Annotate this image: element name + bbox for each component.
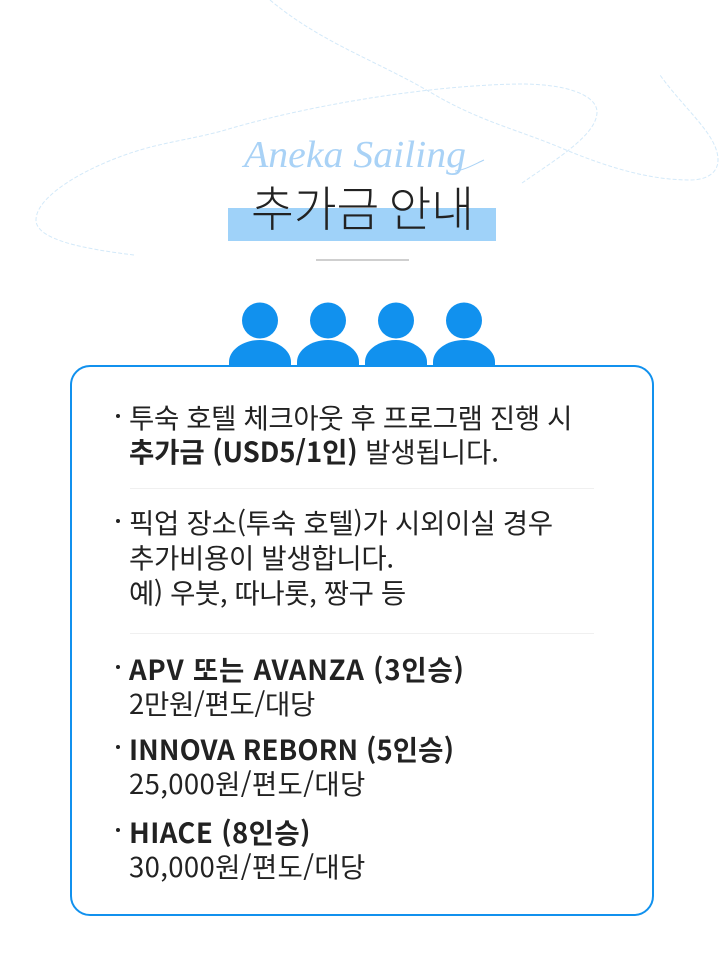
price: APV or AVANZA: APV 또는 AVANZA (3인승) [129, 648, 465, 688]
icon: four people [229, 302, 495, 367]
note: pickup location surcharge: 픽업 장소(투숙 호텔)가 시외이실 경우 [129, 501, 553, 541]
title highlight bar [228, 208, 496, 241]
note: hotel checkout surcharge: 투숙 호텔 체크아웃 후 프로그램 진행 시 [129, 396, 572, 436]
price: INNOVA REBORN: INNOVA REBORN (5인승) [129, 728, 454, 768]
price: HIACE: HIACE (8인승) [129, 811, 311, 851]
title: 추가금 안내 [251, 170, 474, 240]
price: INNOVA REBORN: 25,000원/편도/대당 [129, 762, 366, 802]
note: hotel checkout surcharge [116, 396, 572, 470]
price: HIACE: 30,000원/편도/대당 [129, 845, 366, 885]
price: APV or AVANZA [116, 648, 465, 722]
note: hotel checkout surcharge: 추가금 (USD5/1인) 발생됩니다. [129, 430, 499, 470]
price: HIACE [116, 811, 366, 885]
panel: information box [71, 366, 653, 915]
price: INNOVA REBORN [116, 728, 454, 802]
price: APV or AVANZA: 2만원/편도/대당 [129, 682, 315, 722]
note: pickup location surcharge: 예) 우붓, 따나롯, 짱구 등 [129, 571, 406, 611]
note: pickup location surcharge [116, 501, 553, 611]
script subtitle: Aneka Sailing [241, 134, 466, 176]
divider under title [316, 259, 409, 261]
note: pickup location surcharge: 추가비용이 발생합니다. [129, 536, 394, 576]
